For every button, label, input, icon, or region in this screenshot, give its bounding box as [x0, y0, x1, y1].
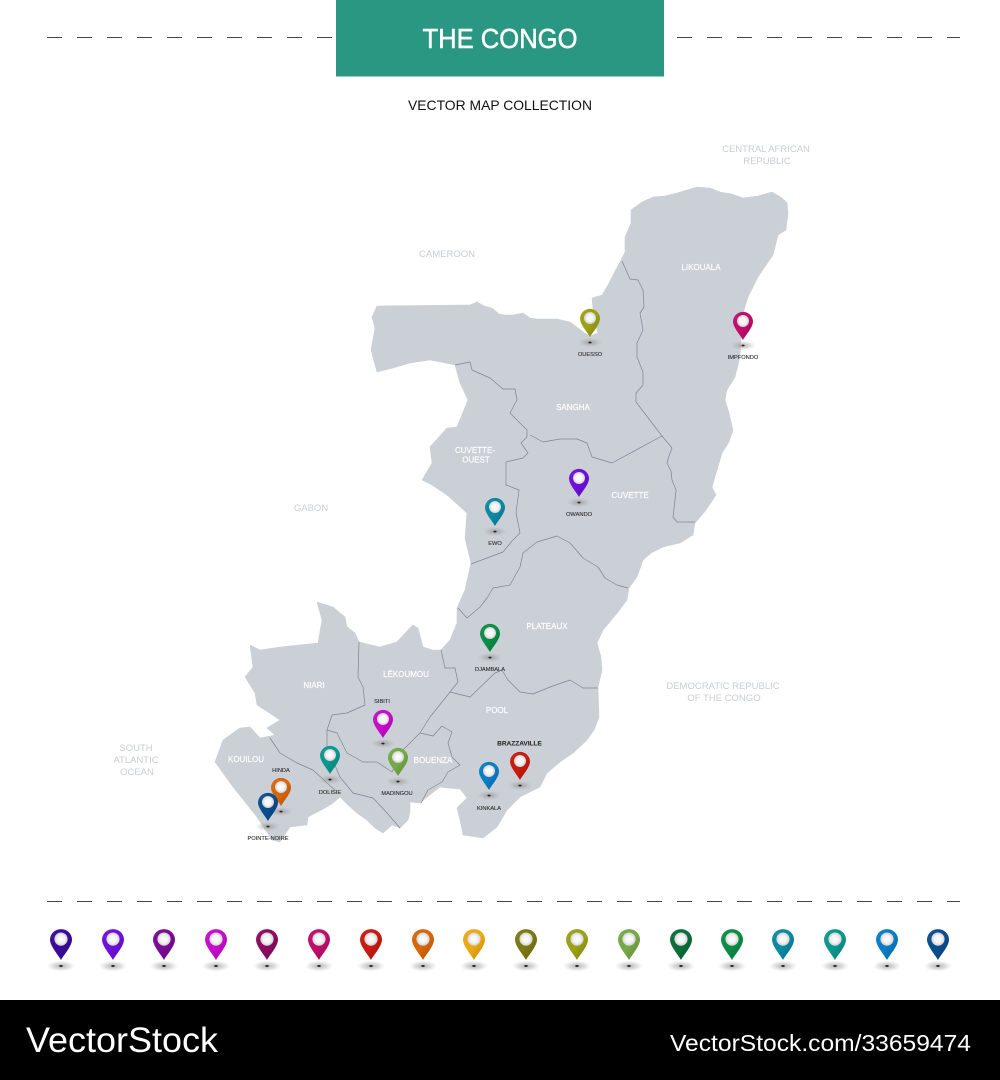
country outline: [215, 187, 788, 842]
region labels: CUVETTE: [611, 491, 649, 500]
region labels: NIARI: [303, 681, 325, 690]
legend pin row: [47, 929, 952, 972]
city labels: POINTE-NOIRE: [247, 836, 289, 842]
city labels: [247, 352, 759, 842]
legend dashed rule: [47, 900, 960, 902]
neighbouring country labels: REPUBLIC: [743, 156, 791, 167]
city labels: DJAMBALA: [475, 667, 505, 673]
city labels: DOLISIE: [319, 790, 341, 796]
neighbouring country labels: GABON: [294, 503, 328, 514]
region labels: SANGHA: [556, 403, 591, 412]
region labels: OUEST: [462, 456, 490, 464]
region labels: LIKOUALA: [681, 263, 721, 272]
region labels: KOUILOU: [228, 755, 264, 764]
neighbouring country labels: ATLANTIC: [113, 755, 159, 766]
title: THE CONGO: [422, 23, 578, 54]
neighbouring country labels: CENTRAL AFRICAN: [722, 144, 810, 155]
map of the Congo: [215, 187, 788, 842]
pin: Brazzaville: [507, 752, 533, 790]
region borders: [270, 261, 695, 828]
neighbouring country labels: [113, 144, 810, 778]
footer url text: VectorStock.com/33659474: [670, 1030, 971, 1056]
pin: Djambala: [477, 624, 503, 662]
header dashed rule right: [677, 36, 960, 38]
neighbouring country labels: CAMEROON: [419, 249, 475, 260]
neighbouring country labels: DEMOCRATIC REPUBLIC: [666, 681, 780, 692]
pin: Kinkala: [476, 762, 502, 800]
pin: Owando: [566, 469, 592, 508]
footer bar: [0, 1000, 1000, 1080]
region labels: LÉKOUMOU: [383, 670, 429, 679]
city labels: KINKALA: [477, 806, 501, 812]
pin: Ouesso: [577, 309, 603, 348]
region labels: CUVETTE-: [455, 446, 495, 455]
title banner: [336, 0, 664, 76]
footer logo text: VectorStock: [26, 1021, 219, 1060]
region labels: PLATEAUX: [526, 622, 568, 631]
pin: Impfondo: [730, 312, 756, 350]
city labels: BRAZZAVILLE: [497, 740, 542, 748]
city labels: MADINGOU: [381, 791, 413, 797]
pin: Pointe-Noire: [255, 793, 281, 832]
city labels: HINDA: [272, 768, 290, 774]
region labels: POOL: [486, 706, 509, 715]
city labels: EWO: [488, 541, 502, 547]
pin: Hinda: [268, 778, 294, 816]
neighbouring country labels: OCEAN: [120, 767, 154, 778]
pin: Sibiti: [370, 710, 396, 748]
pin: Dolisie: [317, 746, 343, 784]
city labels: SIBITI: [374, 699, 390, 705]
header dashed rule left: [47, 36, 333, 38]
region labels: BOUENZA: [414, 756, 453, 765]
pin: Ewo: [482, 498, 508, 536]
neighbouring country labels: SOUTH: [119, 743, 153, 754]
neighbouring country labels: OF THE CONGO: [687, 693, 761, 704]
city labels: IMPFONDO: [728, 355, 759, 361]
region labels: [228, 263, 721, 765]
city labels: OUESSO: [578, 352, 603, 358]
city labels: OWANDO: [566, 512, 593, 518]
pin: Madingou: [385, 748, 411, 786]
subtitle: VECTOR MAP COLLECTION: [408, 97, 592, 113]
city pins: [255, 309, 756, 831]
